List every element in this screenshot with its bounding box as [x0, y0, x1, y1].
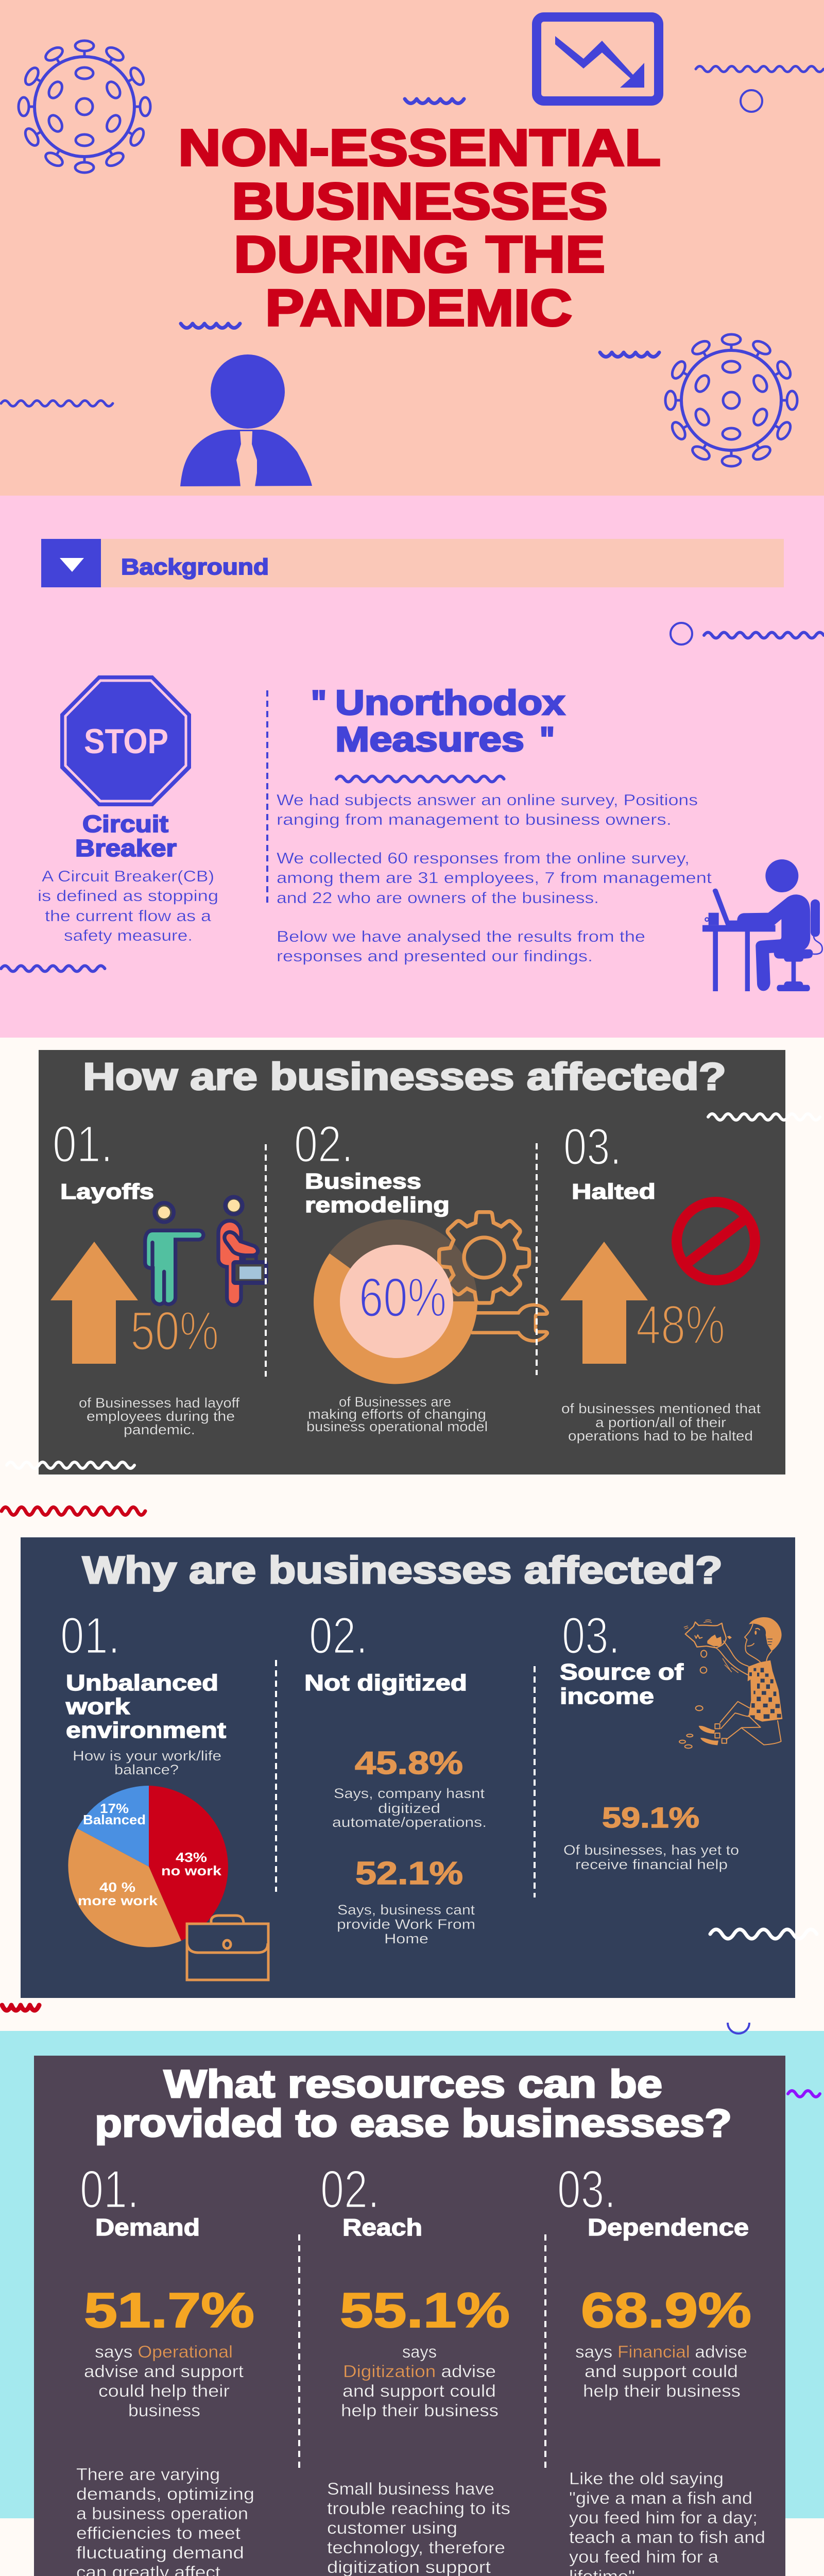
survey description text: ranging from management to business owners.	[277, 810, 672, 828]
stat: 45.8 percent	[332, 1745, 487, 1830]
column headings: Layoffs	[60, 1179, 154, 1204]
column numbers	[80, 2160, 616, 2219]
circuit breaker definition	[38, 867, 218, 944]
column headings: environment	[66, 1718, 226, 1743]
stat: 48 percent: 48%	[636, 1294, 725, 1355]
quote heading: "	[311, 683, 327, 722]
icon: briefcase	[187, 1916, 268, 1980]
title: BUSINESSES	[232, 173, 608, 230]
text: dependence explanation	[569, 2469, 765, 2576]
pie chart: work life balance: 17%	[100, 1801, 129, 1816]
column headings: Not digitized	[304, 1670, 467, 1696]
title	[178, 119, 661, 337]
text: demand explanation: fluctuating demand	[76, 2543, 244, 2562]
survey description text	[277, 791, 712, 965]
background heading bar	[41, 539, 784, 587]
stat: 52.1 percent: provide Work From	[337, 1917, 475, 1932]
column headings: Reach	[342, 2214, 422, 2241]
heading: provided to ease businesses?	[95, 2102, 732, 2145]
text: financial advice: and support could	[585, 2362, 738, 2381]
icon: prohibited sign	[677, 1202, 755, 1280]
caption: layoffs: of Businesses had layoff	[79, 1395, 240, 1411]
title: NON-ESSENTIAL	[178, 119, 661, 177]
text: operational advice: business	[128, 2401, 200, 2420]
icon: stop sign	[60, 675, 191, 806]
column numbers: 01.	[60, 1607, 120, 1665]
text: digitization advice: says	[402, 2342, 437, 2361]
text: reach explanation: trouble reaching to its	[327, 2499, 510, 2518]
column headings: Business	[305, 1169, 421, 1193]
pie chart: work life balance: more work	[78, 1893, 158, 1908]
survey description text: We collected 60 responses from the online survey,	[277, 849, 690, 867]
panel: how are businesses affected	[7, 1050, 820, 1475]
caption: layoffs: pandemic.	[124, 1422, 195, 1437]
heading: What resources can be	[164, 2062, 662, 2106]
stat: 45.8 percent: 45.8%	[355, 1745, 463, 1781]
column numbers: 01.	[80, 2160, 139, 2219]
column numbers: 03.	[557, 2160, 616, 2219]
circuit breaker heading: Circuit	[82, 810, 168, 837]
stats: 55.1%	[340, 2283, 510, 2338]
caption: halted: of businesses mentioned that	[561, 1401, 761, 1416]
text: dependence explanation: you feed him for a day;	[569, 2508, 758, 2527]
survey description text: responses and presented our findings.	[277, 947, 593, 965]
pie chart: work life balance: 43%	[176, 1850, 207, 1865]
icon: up arrow 50	[50, 1242, 138, 1364]
survey description text: and 22 who are owners of the business.	[277, 889, 599, 907]
stat: 59.1 percent: receive financial help	[575, 1857, 728, 1872]
decorative circle and squiggle	[1, 623, 824, 972]
column headings	[95, 2214, 749, 2241]
quote heading: "	[540, 720, 555, 759]
text: dependence explanation: you feed him for a	[569, 2547, 719, 2566]
text: demand explanation: demands, optimizing	[76, 2484, 254, 2503]
heading	[95, 2062, 732, 2145]
quote heading: Measures	[335, 720, 524, 759]
column numbers: 03.	[562, 1607, 620, 1665]
text: financial advice	[575, 2342, 747, 2400]
text: financial advice: help their business	[583, 2381, 741, 2400]
caption: remodeling	[306, 1394, 488, 1434]
column headings: income	[560, 1684, 654, 1709]
circuit breaker definition: the current flow as a	[45, 907, 212, 925]
caption: remodeling: of Businesses are	[339, 1394, 451, 1410]
column headings: Unbalanced	[66, 1670, 218, 1696]
circuit breaker definition: is defined as stopping	[38, 887, 218, 905]
squiggles	[7, 1114, 820, 1468]
column headings: remodeling	[305, 1193, 450, 1217]
text: digitization advice: and support could	[342, 2381, 496, 2400]
survey description text: We had subjects answer an online survey, Positions	[277, 791, 698, 809]
pie question: balance?	[114, 1762, 179, 1777]
column numbers	[60, 1607, 620, 1665]
stat: 45.8 percent: digitized	[378, 1801, 440, 1816]
survey description text: among them are 31 employees, 7 from management	[277, 869, 712, 887]
background heading bar: Background	[121, 554, 269, 580]
pie chart: work life balance	[68, 1786, 228, 1947]
circuit breaker definition: A Circuit Breaker(CB)	[42, 867, 214, 885]
panel: background	[1, 539, 824, 991]
column numbers: 02.	[320, 2160, 380, 2219]
icon: gear	[439, 1212, 547, 1341]
caption: halted: a portion/all of their	[595, 1415, 726, 1430]
column headings: Halted	[572, 1179, 656, 1204]
stat: 45.8 percent: Says, company hasnt	[334, 1786, 485, 1801]
stat: 45.8 percent: automate/operations.	[332, 1815, 487, 1830]
donut chart: 60 percent	[314, 1212, 547, 1384]
decorative squiggles	[1, 66, 823, 406]
text: demand explanation: a business operation	[76, 2504, 248, 2523]
icon: business person	[180, 354, 312, 486]
stat: 52.1 percent: Home	[384, 1931, 428, 1946]
text: reach explanation: customer using	[327, 2518, 457, 2537]
text: reach explanation: digitization support	[327, 2557, 491, 2576]
heading: Why are businesses affected?	[82, 1549, 723, 1591]
caption: halted: operations had to be halted	[568, 1428, 753, 1444]
stats	[84, 2283, 751, 2338]
column headings: work	[65, 1694, 130, 1719]
column numbers: 01.	[53, 1115, 113, 1173]
stats: 51.7%	[84, 2283, 254, 2338]
column headings: Dependence	[588, 2214, 749, 2241]
pie question	[73, 1748, 221, 1777]
title: PANDEMIC	[265, 279, 572, 337]
stat: 59.1 percent: 59.1%	[602, 1801, 699, 1834]
pie chart: work life balance: no work	[161, 1863, 222, 1878]
text: reach explanation	[327, 2479, 510, 2576]
column numbers	[53, 1115, 622, 1176]
icon: virus right	[665, 334, 797, 466]
icon: person at desk with laptop	[702, 859, 822, 991]
column headings	[65, 1659, 683, 1743]
circuit breaker heading	[75, 810, 177, 861]
header section	[1, 17, 823, 486]
stat: 52.1 percent	[337, 1856, 475, 1946]
text: demand explanation	[76, 2465, 254, 2576]
stat: 52.1 percent: Says, business cant	[337, 1902, 475, 1918]
text: reach explanation: technology, therefore	[327, 2538, 505, 2557]
panel: what resources can be provided	[34, 2023, 820, 2576]
caption: remodeling: business operational model	[306, 1419, 488, 1434]
quote heading	[311, 683, 565, 759]
pie question: How is your work/life	[73, 1748, 221, 1764]
caption: remodeling: making efforts of changing	[308, 1406, 486, 1422]
text: demand explanation: There are varying	[76, 2465, 220, 2484]
icon: virus left	[19, 41, 150, 173]
caption: halted	[561, 1401, 761, 1444]
text: digitization advice	[341, 2342, 499, 2420]
text: dependence explanation: teach a man to fish and	[569, 2528, 765, 2547]
icon: stop sign: STOP	[84, 722, 168, 761]
stat: 50 percent: 50%	[130, 1300, 219, 1362]
column numbers: 02.	[294, 1115, 353, 1173]
stat: 59.1 percent	[563, 1801, 739, 1872]
text: digitization advice: help their business	[341, 2401, 499, 2420]
text: reach explanation: Small business have	[327, 2479, 494, 2498]
column numbers: 02.	[309, 1607, 368, 1665]
quote heading: Unorthodox	[335, 683, 565, 722]
heading: How are businesses affected?	[83, 1055, 726, 1098]
circuit breaker heading: Breaker	[75, 835, 177, 861]
caption: layoffs	[79, 1395, 240, 1437]
text: operational advice: says Operational	[95, 2342, 233, 2361]
text: demand explanation: efficiencies to meet	[76, 2523, 241, 2543]
caption: layoffs: employees during the	[87, 1409, 235, 1424]
column headings	[60, 1169, 656, 1217]
icon: layoff figures	[145, 1197, 266, 1305]
text: digitization advice: Digitization advise	[343, 2362, 496, 2381]
text: financial advice: says Financial advise	[575, 2342, 747, 2361]
column numbers: 03.	[563, 1118, 622, 1176]
column headings: Source of	[560, 1659, 683, 1685]
stat: 52.1 percent: 52.1%	[355, 1856, 463, 1891]
text: operational advice: could help their	[98, 2381, 230, 2400]
donut chart: 60 percent: 60%	[359, 1266, 447, 1328]
stat: 59.1 percent: Of businesses, has yet to	[563, 1842, 739, 1858]
survey description text: Below we have analysed the results from the	[277, 927, 645, 945]
stats: 68.9%	[581, 2283, 751, 2338]
text: operational advice: advise and support	[84, 2362, 244, 2381]
circuit breaker definition: safety measure.	[64, 926, 193, 944]
text: dependence explanation: "give a man a fish and	[569, 2488, 752, 2507]
icon: up arrow 48	[560, 1242, 648, 1364]
icon: declining chart	[537, 17, 659, 101]
column headings: Demand	[95, 2214, 200, 2241]
pie chart: work life balance: Balanced	[83, 1812, 146, 1827]
title: DURING THE	[234, 226, 605, 283]
text: dependence explanation: Like the old saying	[569, 2469, 724, 2488]
text: operational advice	[84, 2342, 244, 2420]
panel: why are businesses affected	[21, 1537, 817, 1998]
pie chart: work life balance: 40 %	[99, 1879, 135, 1895]
icon: child shaking piggy bank	[679, 1617, 782, 1748]
